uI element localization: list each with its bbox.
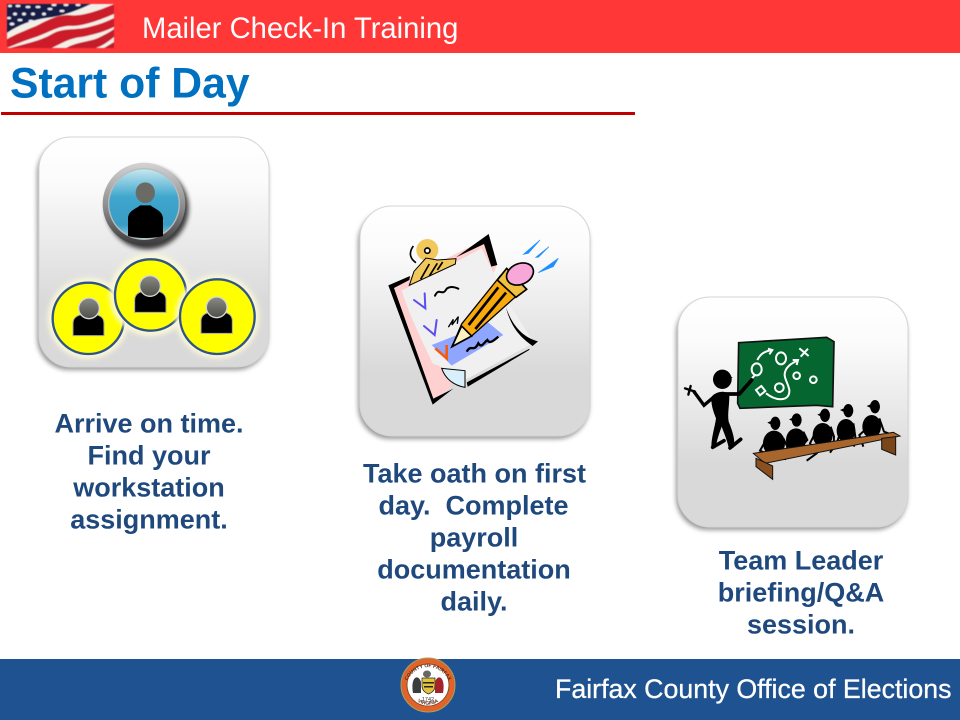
icon: worker centre <box>109 254 192 336</box>
panel: take oath <box>358 206 590 616</box>
header bar <box>0 0 960 53</box>
heading underline <box>1 112 635 115</box>
clipboard sheet <box>388 234 538 405</box>
footer bar <box>0 659 960 720</box>
caption: team leader briefing: session. <box>747 610 855 640</box>
caption: take oath: payroll <box>430 522 518 552</box>
card background 1 <box>37 137 269 370</box>
panel: team leader briefing <box>676 297 908 640</box>
coach <box>685 370 752 448</box>
icon: coach at chalkboard <box>685 337 900 479</box>
caption: arrive on time: assignment. <box>70 504 228 534</box>
motion lines <box>523 240 558 273</box>
caption: arrive on time: Find your <box>88 440 211 470</box>
icon: clipboard and pencil <box>388 234 558 405</box>
caption: take oath: daily. <box>440 586 508 616</box>
icon: county seal: VIRGINIA <box>418 698 438 705</box>
bench <box>753 432 900 479</box>
caption: take oath: documentation <box>377 554 571 584</box>
icon: county seal: COUNTY OF FAIRFAX <box>404 664 452 680</box>
caption: arrive on time: workstation <box>72 472 225 502</box>
checks and scribbles <box>414 287 458 335</box>
orange check <box>435 345 447 358</box>
audience <box>760 400 890 461</box>
scribble <box>467 337 498 352</box>
caption: arrive on time: Arrive on time. <box>54 408 244 438</box>
caption: take oath: Take oath on first <box>363 458 586 488</box>
chalkboard <box>738 337 834 408</box>
icon: leader badge <box>103 163 189 249</box>
footer text: Fairfax County Office of Elections <box>555 674 951 704</box>
caption: team leader briefing: briefing/Q&A <box>718 578 884 608</box>
card background 2 <box>358 206 590 439</box>
panel: arrive on time <box>37 137 269 534</box>
icon: county seal: 1742 <box>422 697 434 703</box>
caption: team leader briefing: Team Leader <box>719 546 884 576</box>
card background 3 <box>676 297 908 530</box>
icon: team leader and workers <box>48 163 259 359</box>
pencil <box>452 259 537 347</box>
clip <box>409 239 456 285</box>
caption: take oath: day. Complete <box>378 490 569 520</box>
blue highlight <box>432 323 503 366</box>
icon: worker right <box>175 275 259 359</box>
icon: american flag <box>7 4 114 48</box>
icon: county seal <box>400 658 456 712</box>
slide heading: Start of Day <box>10 60 250 108</box>
header title: Mailer Check-In Training <box>142 13 458 45</box>
icon: worker left <box>48 278 129 359</box>
